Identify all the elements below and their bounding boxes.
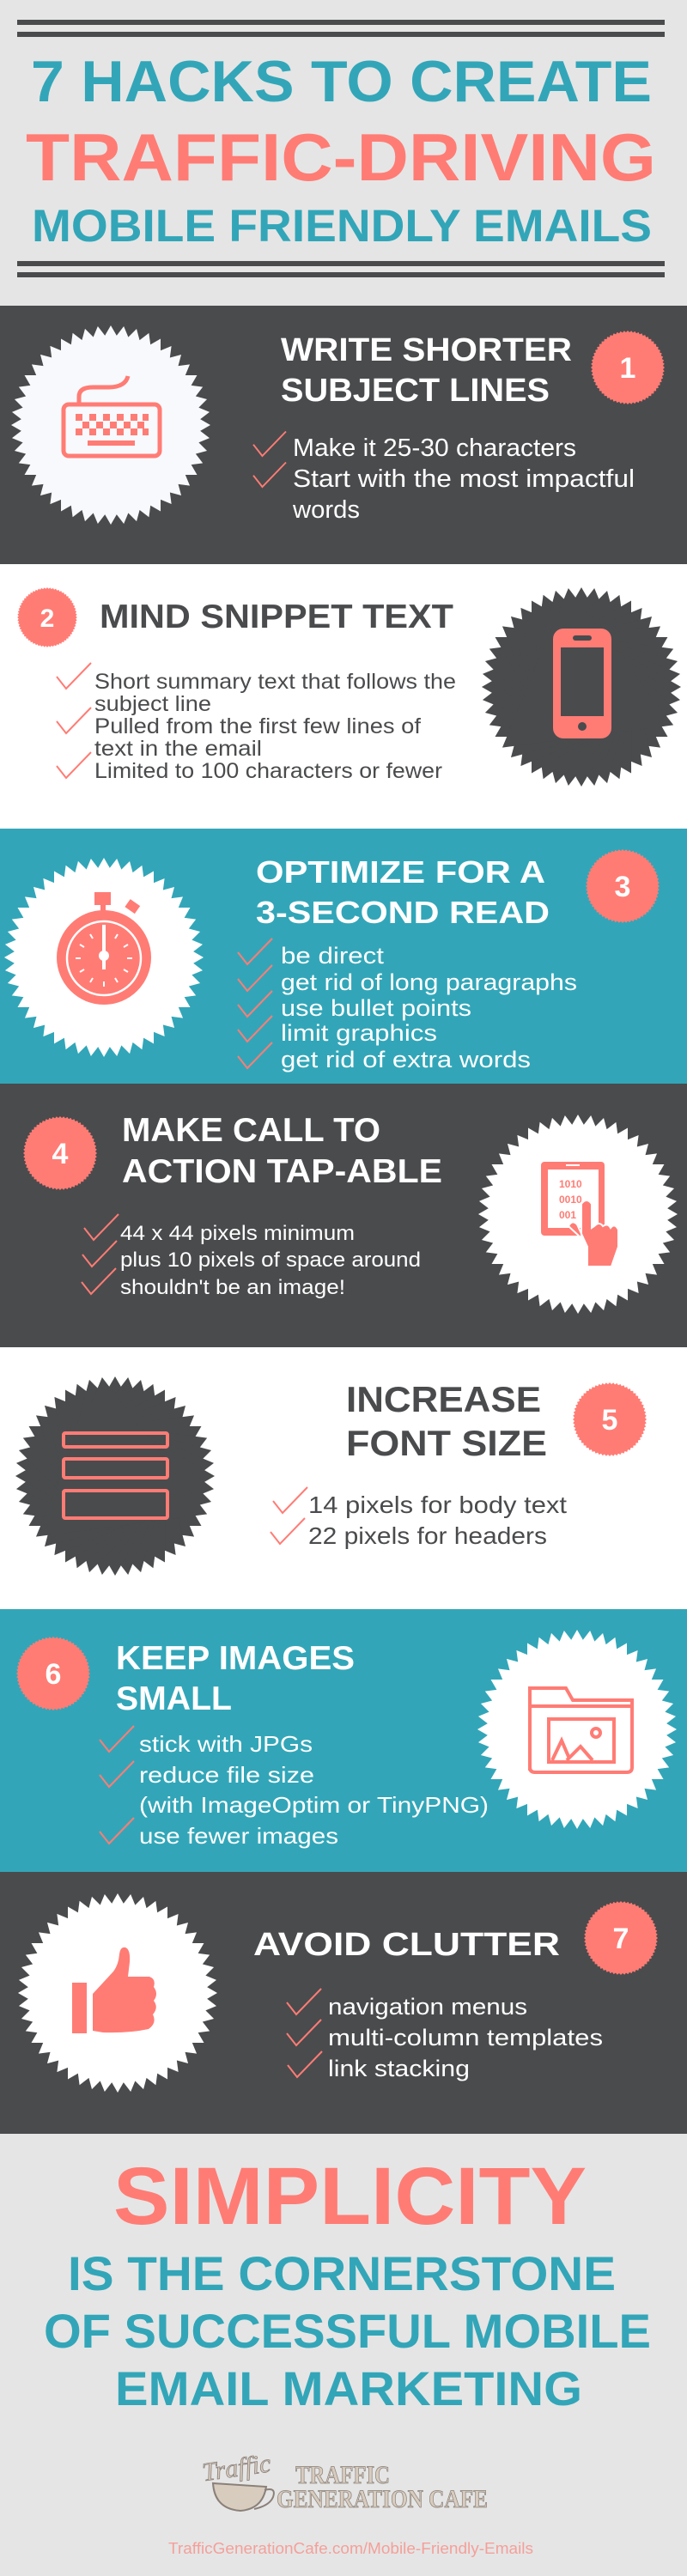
bullet list 2: text in the email: [94, 737, 262, 761]
badge 1: [591, 331, 665, 404]
heading 6: SMALL: [116, 1680, 232, 1717]
heading 1: [281, 332, 572, 409]
heading 6: [116, 1640, 355, 1717]
bullet list 4: shouldn't be an image!: [120, 1276, 345, 1299]
badge 5: [573, 1382, 647, 1456]
badge 3: [586, 849, 660, 923]
closing statement: OF SUCCESSFUL MOBILE: [44, 2304, 651, 2358]
panel: hack 4: [0, 1083, 687, 1347]
icon: keyboard starburst: [11, 294, 242, 543]
panel: hack 7: [0, 1862, 687, 2134]
bullet list 7: [287, 1989, 603, 2081]
bullet list 4: [82, 1214, 421, 1299]
heading 3: [256, 854, 550, 930]
title: 7 HACKS TO CREATE: [31, 49, 652, 114]
badge 6: 6: [46, 1658, 61, 1691]
panel: hack 2: [0, 556, 687, 829]
bullet list 5: [271, 1487, 567, 1549]
heading 3: 3-SECOND READ: [256, 895, 550, 930]
header panel: [0, 0, 687, 306]
title: MOBILE FRIENDLY EMAILS: [32, 201, 652, 252]
bullet list 3: [238, 939, 577, 1072]
panel: footer: [0, 2134, 687, 2576]
heading 1: SUBJECT LINES: [281, 373, 550, 409]
bullet list 6: reduce file size: [139, 1762, 314, 1788]
bullet list 6: (with ImageOptim or TinyPNG): [139, 1792, 489, 1818]
bullet list 7: multi-column templates: [328, 2025, 603, 2050]
icon: tablet tap starburst: 0010: [559, 1194, 582, 1206]
heading 4: [122, 1112, 442, 1190]
icon: font size starburst: [15, 1345, 246, 1594]
heading 5: [346, 1379, 547, 1463]
badge 2: 2: [40, 605, 54, 633]
bullet list 7: link stacking: [328, 2056, 470, 2081]
bullet list 7: navigation menus: [328, 1994, 527, 2020]
bullet list 2: subject line: [94, 692, 211, 716]
bullet list 5: 14 pixels for body text: [308, 1492, 567, 1518]
bullet list 3: use bullet points: [281, 995, 471, 1021]
bullet list 1: Make it 25-30 characters: [293, 434, 576, 462]
closing statement: EMAIL MARKETING: [115, 2361, 582, 2415]
badge 7: [584, 1901, 658, 1975]
heading 5: INCREASE: [346, 1379, 541, 1419]
bullet list 1: Start with the most impactful: [293, 465, 635, 493]
bullet list 6: use fewer images: [139, 1823, 338, 1849]
icon: tablet tap starburst: 1010: [559, 1178, 582, 1190]
heading 1: WRITE SHORTER: [281, 332, 572, 368]
panel: hack 3: [0, 826, 687, 1084]
icon: stopwatch starburst: [4, 826, 235, 1075]
badge 6: [16, 1637, 90, 1710]
heading 3: OPTIMIZE FOR A: [256, 854, 545, 890]
bullet list 3: be direct: [281, 943, 385, 969]
icon: thumbs up starburst: [18, 1862, 249, 2111]
bullet list 5: 22 pixels for headers: [308, 1522, 547, 1549]
bullet list 1: words: [292, 496, 360, 524]
bullet list 6: [100, 1726, 489, 1849]
bullet list 4: plus 10 pixels of space around: [120, 1249, 421, 1272]
logo: TRAFFIC: [295, 2461, 390, 2489]
bullet list 2: Short summary text that follows the: [94, 670, 456, 694]
icon: image folder starburst: [477, 1598, 687, 1847]
bullet list 2: Limited to 100 characters or fewer: [94, 759, 442, 783]
badge 3: 3: [615, 871, 630, 903]
logo: GENERATION CAFE: [277, 2485, 488, 2513]
heading 4: ACTION TAP-ABLE: [122, 1153, 442, 1190]
bullet list 2: [57, 663, 456, 783]
logo: Traffic: [200, 2449, 272, 2487]
logo: [200, 2449, 488, 2513]
badge 2: [17, 587, 77, 647]
badge 5: 5: [602, 1404, 617, 1437]
heading 2: MIND SNIPPET TEXT: [100, 598, 453, 635]
title: TRAFFIC-DRIVING: [26, 119, 656, 195]
bullet list 6: stick with JPGs: [139, 1731, 313, 1757]
panel: hack 6: [0, 1598, 687, 1872]
heading 4: MAKE CALL TO: [122, 1112, 380, 1149]
bullet list 1: [253, 431, 635, 524]
heading 7: AVOID CLUTTER: [253, 1927, 560, 1963]
closing statement: [44, 2151, 651, 2415]
badge 1: 1: [620, 352, 635, 385]
panel: hack 5: [0, 1345, 687, 1609]
panel: hack 1: [0, 294, 687, 564]
closing statement: SIMPLICITY: [113, 2151, 587, 2242]
url: TrafficGenerationCafe.com/Mobile-Friendly-Emails: [168, 2540, 533, 2557]
icon: phone starburst: [482, 556, 687, 805]
title: [26, 49, 656, 252]
closing statement: IS THE CORNERSTONE: [68, 2246, 616, 2300]
bullet list 2: Pulled from the first few lines of: [94, 714, 421, 738]
icon: tablet tap starburst: 001: [559, 1209, 576, 1221]
badge 4: [23, 1116, 97, 1190]
bullet list 3: limit graphics: [281, 1020, 437, 1046]
badge 4: 4: [52, 1138, 69, 1170]
bullet list 3: get rid of long paragraphs: [281, 969, 577, 995]
heading 5: FONT SIZE: [346, 1423, 547, 1463]
badge 7: 7: [613, 1923, 629, 1955]
bullet list 4: 44 x 44 pixels minimum: [120, 1222, 355, 1245]
bullet list 3: get rid of extra words: [281, 1047, 531, 1072]
icon: tablet tap starburst: [478, 1083, 687, 1332]
heading 6: KEEP IMAGES: [116, 1640, 355, 1677]
